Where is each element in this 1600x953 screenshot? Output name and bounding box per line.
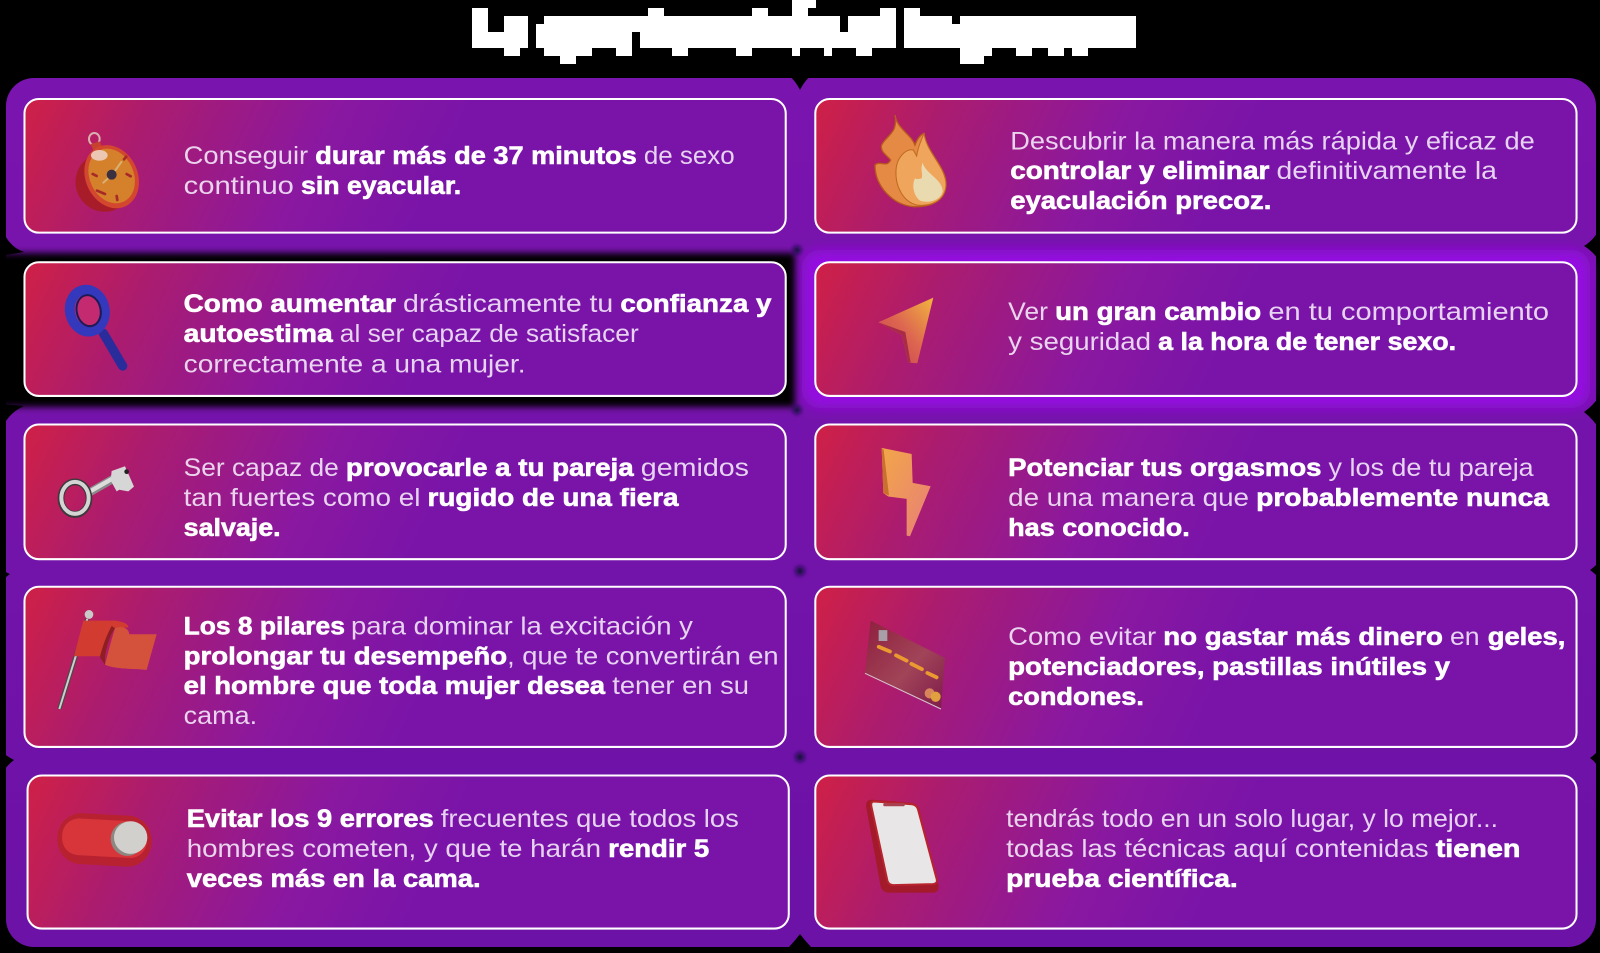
text: no gastar: potenciadores, pastillas inútiles y — [1008, 654, 1450, 681]
text: los 8 pilares: , que te convertirán en — [507, 643, 779, 670]
text: potenciar: has conocido. — [1008, 515, 1190, 542]
text: ver un gran cambio: y seguridad — [1008, 329, 1151, 356]
text: los 8 pilares — [184, 613, 779, 730]
text: como aumentar: al ser capaz de satisfacer — [340, 321, 639, 348]
card: como aumentar — [24, 262, 786, 396]
title: al — [852, 17, 894, 48]
text: todo en un lugar: tendrás todo en un solo lugar, y lo mejor... — [1006, 806, 1498, 833]
text: provocarle: Ser capaz de — [184, 455, 339, 482]
icon: navigation arrow — [878, 298, 933, 363]
icon: magnifying glass — [66, 287, 123, 366]
card: descubrir la manera — [815, 99, 1577, 233]
text: provocarle: tan fuertes como el — [184, 485, 420, 512]
text: no gastar — [1008, 624, 1565, 711]
bright glow behind right second row card — [802, 250, 1590, 408]
text: no gastar: condones. — [1008, 684, 1144, 711]
text: durar más — [184, 143, 735, 200]
text: como aumentar: confianza y — [620, 291, 772, 318]
text: durar más: continuo — [184, 173, 294, 200]
text: descubrir: controlar y eliminar — [1010, 158, 1270, 185]
icon: credit card — [865, 621, 945, 709]
icon: smartphone — [866, 800, 939, 893]
title: obtendrás — [650, 17, 836, 48]
text: durar más: Conseguir — [184, 143, 308, 170]
card: todo en un solo lugar — [815, 776, 1577, 929]
text: ver un gran cambio — [1008, 299, 1549, 356]
text: ver un gran cambio: en tu comportamiento — [1268, 299, 1549, 326]
text: como aumentar — [184, 291, 772, 378]
text: los 8 pilares: para dominar la excitación y — [351, 613, 694, 640]
dark specks at panel joints — [793, 246, 804, 762]
text: no gastar: en — [1450, 624, 1480, 651]
text: potenciar: de una manera que — [1008, 485, 1249, 512]
text: los 8 pilares: prolongar tu desempeño — [184, 643, 507, 670]
text: ver un gran cambio: un gran cambio — [1055, 299, 1261, 326]
icon: lightning bolt — [882, 448, 931, 536]
card: ver un gran cambio — [815, 262, 1577, 396]
icon: stopwatch — [66, 133, 149, 221]
text: potenciar — [1008, 455, 1549, 542]
text: los 8 pilares: el hombre que toda mujer desea — [184, 673, 605, 700]
text: no gastar: geles, — [1488, 624, 1565, 651]
icon: toggle switch — [56, 812, 153, 868]
text: los 8 pilares: cama. — [184, 703, 257, 730]
title — [472, 0, 1136, 64]
icon: key — [61, 466, 134, 515]
card: evitar los 9 errores — [28, 776, 789, 929]
text: todo en un lugar: prueba científica. — [1006, 866, 1238, 893]
text: todo en un lugar — [1006, 806, 1520, 893]
text: descubrir: Descubrir la manera más rápida y eficaz de — [1010, 128, 1535, 155]
text: potenciar: y los de tu pareja — [1329, 455, 1534, 482]
text: como aumentar: Como aumentar — [184, 291, 396, 318]
card: provocarle a tu pareja — [24, 424, 786, 559]
card: no gastar más dinero — [815, 587, 1577, 747]
text: los 8 pilares: Los 8 pilares — [184, 613, 345, 640]
text: provocarle — [184, 455, 749, 542]
text: descubrir: eyaculación precoz. — [1010, 188, 1271, 215]
card: potenciar tus orgasmos — [815, 424, 1577, 559]
text: ver un gran cambio: Ver — [1008, 299, 1048, 326]
text: durar más: sin eyacular. — [301, 173, 461, 200]
text: evitar errores: Evitar los 9 errores — [187, 806, 434, 833]
text: ver un gran cambio: a la hora de tener sexo. — [1158, 329, 1456, 356]
text: provocarle: rugido de una fiera — [428, 485, 679, 512]
text: no gastar: no gastar más dinero — [1163, 624, 1443, 651]
title: que — [546, 17, 630, 48]
card: durar más de 37 minutos — [24, 99, 786, 233]
text: como aumentar: autoestima — [184, 321, 333, 348]
text: provocarle: salvaje. — [184, 515, 281, 542]
title: Lo — [505, 17, 527, 48]
text: como aumentar: correctamente a una mujer. — [184, 351, 526, 378]
text: descubrir — [1010, 128, 1535, 215]
card: los 8 pilares — [24, 587, 786, 747]
text: potenciar: Potenciar tus orgasmos — [1008, 455, 1321, 482]
icon: fire — [875, 115, 946, 207]
text: evitar errores: veces más en la cama. — [187, 866, 481, 893]
text: como aumentar: drásticamente tu — [403, 291, 613, 318]
text: potenciar: probablemente nunca — [1256, 485, 1549, 512]
text: descubrir: definitivamente la — [1277, 158, 1497, 185]
text: durar más: durar más de 37 minutos — [315, 143, 637, 170]
text: provocarle: provocarle a tu pareja — [346, 455, 634, 482]
text: todo en un lugar: tienen — [1436, 836, 1520, 863]
text: evitar errores: rendir 5 — [608, 836, 709, 863]
text: evitar errores: frecuentes que todos los — [441, 806, 739, 833]
text: evitar errores — [187, 806, 739, 893]
text: evitar errores: hombres cometen, y que te harán — [187, 836, 601, 863]
text: durar más: de sexo — [644, 143, 735, 170]
title: leer el programa — [964, 17, 1134, 48]
text: no gastar: Como evitar — [1008, 624, 1156, 651]
text: provocarle: gemidos — [641, 455, 749, 482]
text: todo en un lugar: todas las técnicas aquí contenidas — [1006, 836, 1429, 863]
black shadow around left second row card — [0, 253, 795, 407]
text: los 8 pilares: tener en su — [612, 673, 749, 700]
icon: red flag — [59, 610, 157, 709]
